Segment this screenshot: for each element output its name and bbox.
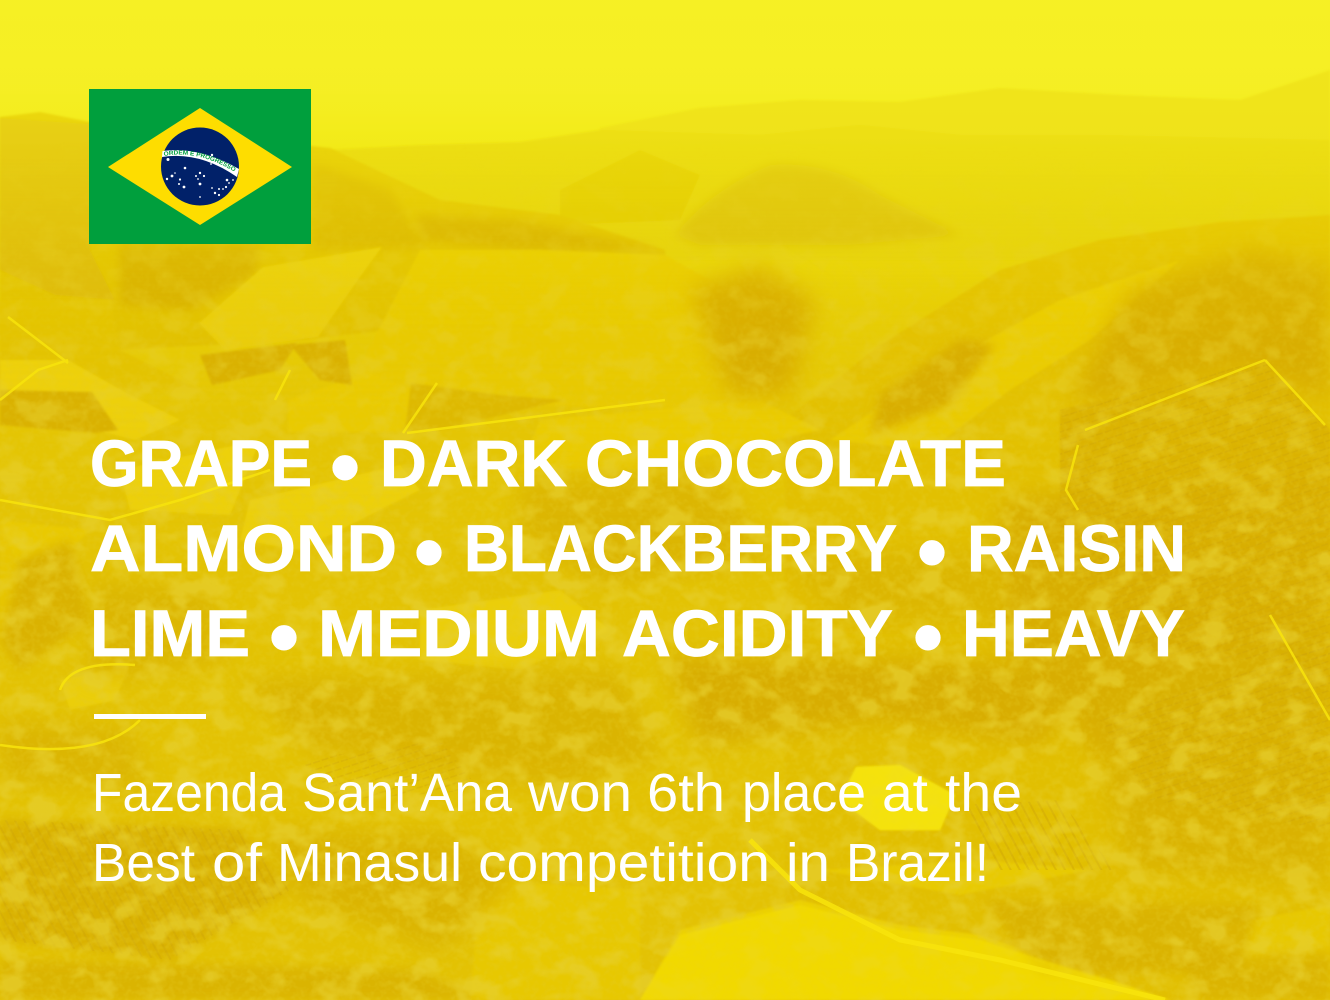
award line 1 bbox=[92, 763, 1022, 823]
flavor line 3: ACIDITY bbox=[622, 596, 893, 670]
award line 2: Brazil! bbox=[846, 833, 989, 893]
flavor line 3: • bbox=[269, 587, 299, 686]
dark fields and shaded slopes bbox=[0, 250, 1330, 1000]
award line 2: of bbox=[212, 833, 263, 893]
dome hill, upper middle bbox=[675, 164, 960, 245]
award description bbox=[92, 763, 1022, 893]
divider line bbox=[94, 714, 206, 719]
flavor line 1: • bbox=[330, 417, 360, 516]
flag motto: ORDEM E PROGRESSO bbox=[164, 150, 236, 171]
flavor line 1 bbox=[90, 417, 1006, 516]
distant hills bbox=[330, 70, 1330, 260]
award line 1: Fazenda bbox=[92, 763, 287, 823]
light fields bbox=[0, 247, 1330, 1000]
overall tonal darkening bbox=[0, 363, 1330, 1000]
flavor line 2 bbox=[90, 502, 1186, 601]
field tracks bbox=[0, 317, 1330, 1000]
flavor line 3: HEAVY bbox=[962, 596, 1185, 670]
right ridge and mid slopes bbox=[0, 215, 1330, 1000]
left hill and forest bbox=[0, 112, 665, 350]
award line 2: Minasul bbox=[277, 833, 462, 893]
award line 1: at bbox=[882, 763, 928, 823]
flavor line 3: LIME bbox=[90, 596, 250, 670]
award line 1: 6th bbox=[647, 763, 725, 823]
award line 2: competition bbox=[478, 833, 770, 893]
bright farm road and farm buildings bbox=[640, 765, 1170, 1000]
award line 2 bbox=[92, 833, 989, 893]
award line 1: place bbox=[742, 763, 866, 823]
flavor notes heading bbox=[90, 417, 1186, 686]
flavor line 3: MEDIUM bbox=[318, 596, 600, 670]
award line 1: won bbox=[527, 763, 632, 823]
award line 2: in bbox=[786, 833, 830, 893]
flavor line 1: GRAPE bbox=[90, 426, 312, 500]
flavor line 3 bbox=[90, 587, 1185, 686]
award line 1: the bbox=[945, 763, 1022, 823]
flavor line 2: • bbox=[917, 502, 947, 601]
flavor line 2: • bbox=[414, 502, 444, 601]
flavor line 3: • bbox=[913, 587, 943, 686]
tree clumps and grain texture bbox=[0, 231, 1330, 1000]
award line 1: Sant’Ana bbox=[302, 763, 513, 823]
flavor line 1: DARK bbox=[380, 426, 567, 500]
icon: Brazilian flag bbox=[89, 89, 311, 244]
flavor line 2: BLACKBERRY bbox=[464, 511, 897, 585]
flavor line 2: RAISIN bbox=[967, 511, 1186, 585]
award line 2: Best bbox=[92, 833, 195, 893]
flavor line 1: CHOCOLATE bbox=[585, 426, 1006, 500]
coffee plantation rows bbox=[0, 360, 1330, 960]
flavor line 2: ALMOND bbox=[90, 511, 397, 585]
